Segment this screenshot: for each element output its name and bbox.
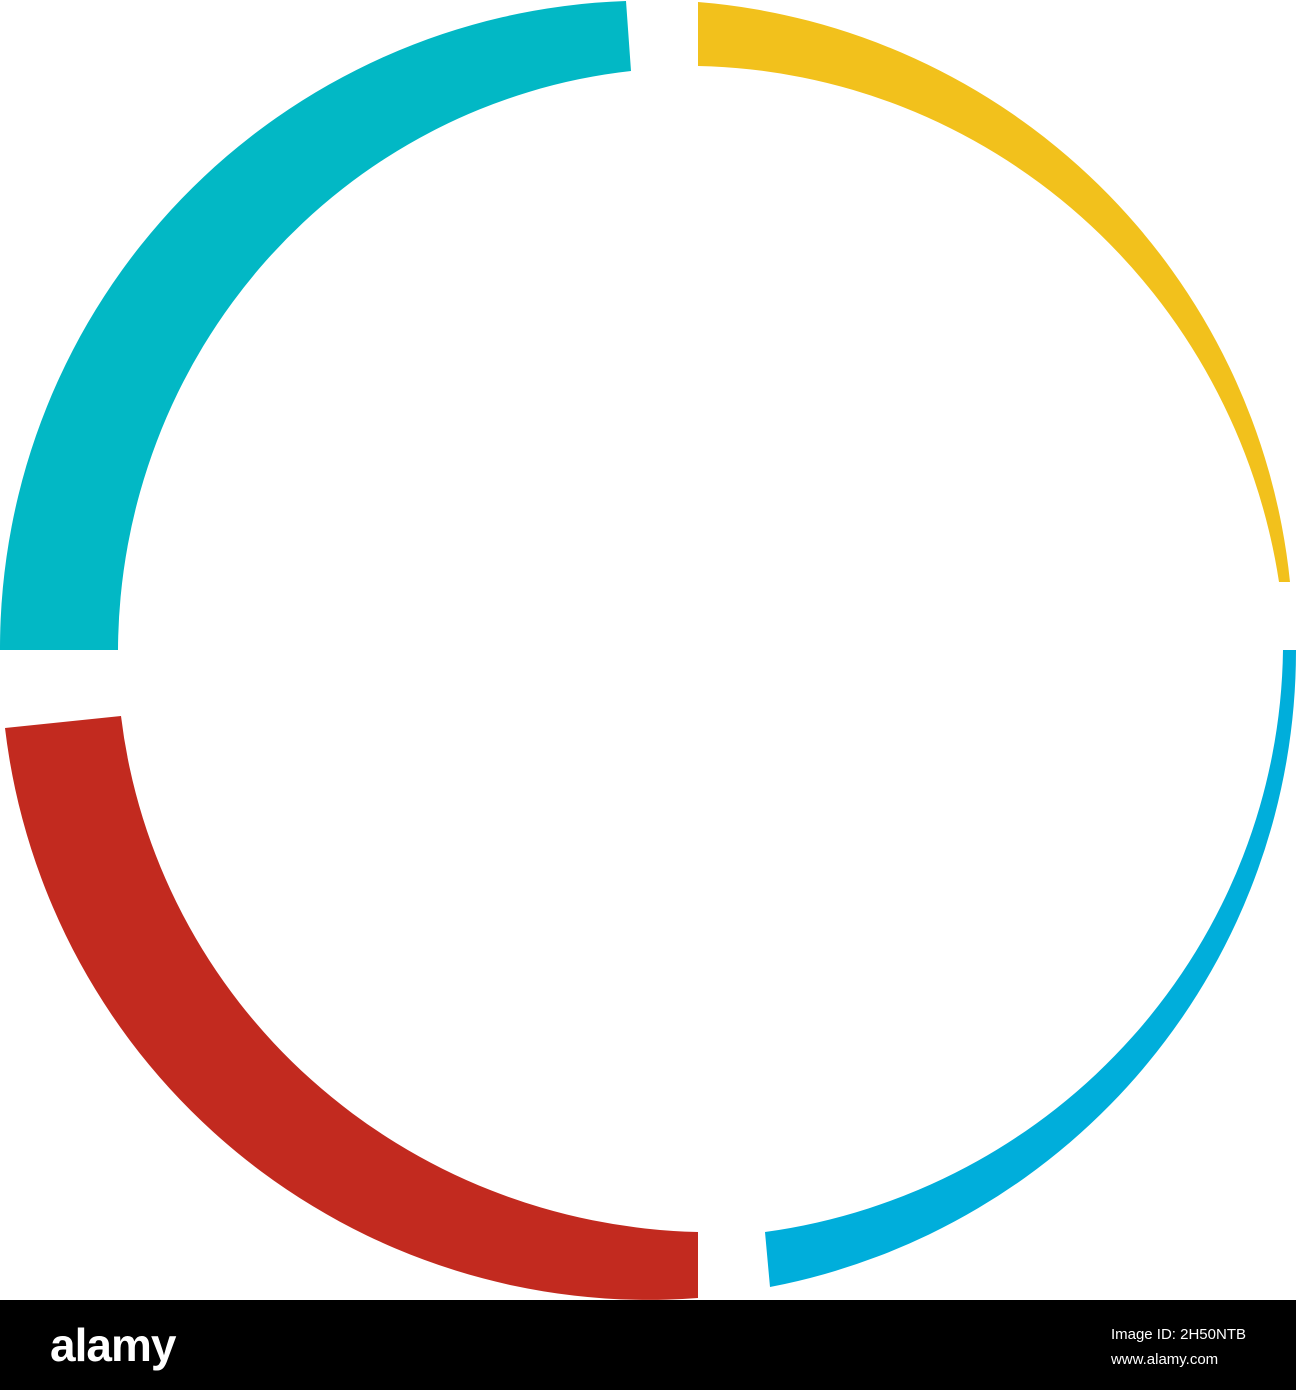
segment: red bottom-left — [5, 716, 698, 1300]
segment: blue bottom-right — [765, 650, 1296, 1287]
footer bar — [0, 1300, 1296, 1390]
image id text: www.alamy.com — [1111, 1351, 1218, 1368]
image id text — [1111, 1326, 1246, 1368]
segment: yellow top-right — [698, 2, 1290, 582]
segment: teal top-left — [0, 1, 631, 650]
image id text: Image ID: 2H50NTB — [1111, 1326, 1246, 1343]
logo text: alamy — [50, 1319, 175, 1371]
